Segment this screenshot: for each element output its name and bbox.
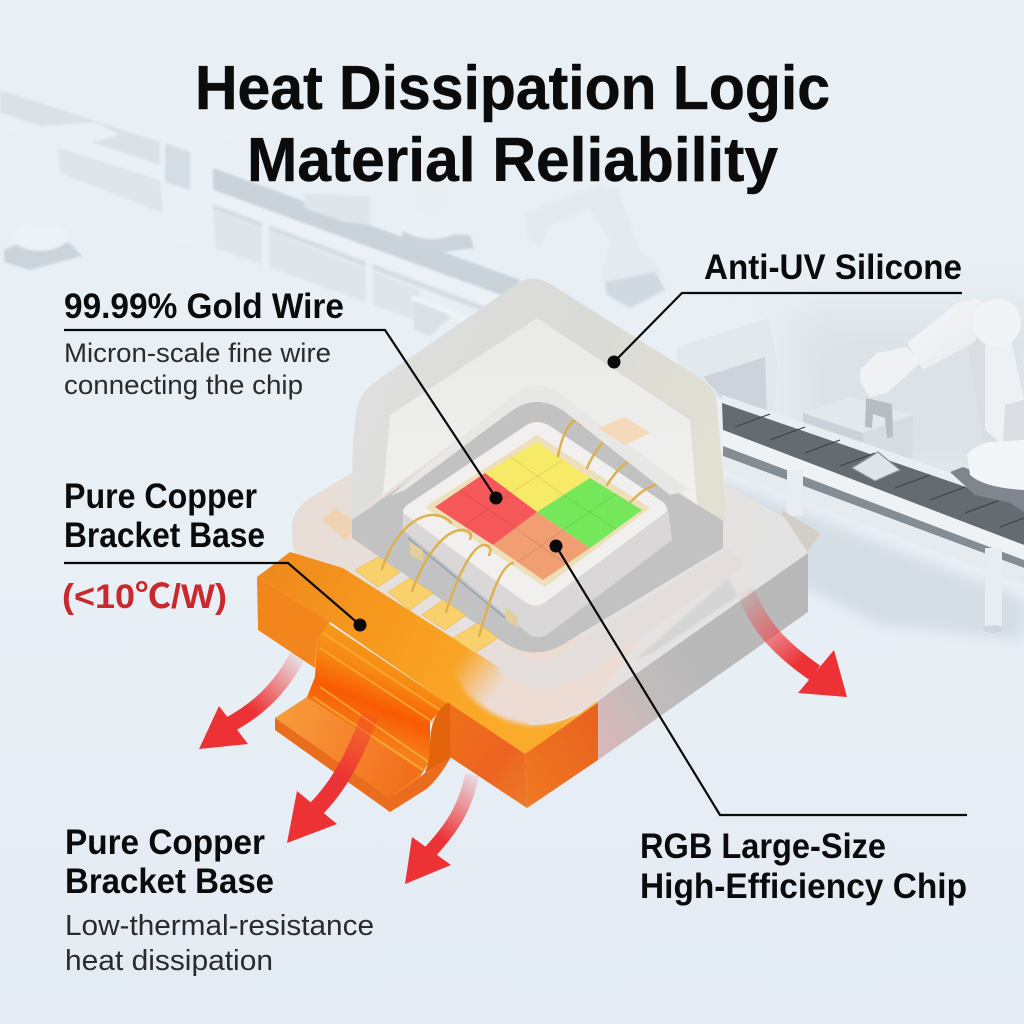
table edge — [412, 295, 470, 325]
dome inner face — [383, 318, 697, 505]
silicone dome — [352, 278, 727, 523]
callout: pure copper bracket base lower: Low-thermal-resistance — [65, 910, 374, 942]
step wall — [425, 703, 451, 772]
robot upper arm — [907, 298, 990, 370]
robot elbow — [973, 299, 1021, 347]
product on belt — [852, 452, 900, 481]
robot base plate — [950, 467, 1024, 512]
tab front — [275, 718, 390, 812]
dome outer band — [352, 278, 727, 523]
robot gripper — [865, 398, 893, 438]
dome inner ring — [390, 385, 690, 496]
left block face — [257, 577, 330, 668]
callout: gold wire: connecting the chip — [64, 370, 303, 400]
arrow left — [199, 655, 298, 749]
conveyor legs — [787, 470, 803, 516]
arrow middle — [287, 715, 370, 843]
copper bracket — [257, 552, 640, 812]
orange reflection — [598, 417, 650, 445]
top surface — [257, 552, 598, 753]
callout: pure copper bracket base lower: Bracket Base — [65, 862, 274, 901]
arrow back right — [745, 590, 847, 697]
gold pads — [355, 557, 498, 653]
bend surface — [275, 623, 447, 798]
faded robot middle — [304, 125, 474, 254]
faded robot arm — [412, 185, 665, 336]
title — [195, 54, 830, 195]
gold wires — [382, 420, 689, 636]
robot wrist — [860, 347, 920, 397]
frosted fade over copper — [440, 630, 640, 725]
frosted top plate — [292, 420, 808, 725]
body right face — [598, 553, 808, 760]
heat arrows — [199, 590, 847, 884]
callout: gold wire: 99.99% Gold Wire — [64, 287, 344, 326]
gray recess and step — [352, 400, 745, 687]
shadow under right conveyor — [720, 480, 1024, 640]
yellow quadrant — [485, 442, 590, 512]
bend highlights — [313, 633, 440, 770]
RGB chip — [425, 435, 650, 587]
callout: pure copper bracket base lower — [65, 823, 374, 977]
title: Heat Dissipation Logic — [195, 54, 830, 123]
orange quadrant — [493, 512, 590, 580]
callout: pure copper bracket base upper — [62, 477, 366, 632]
tan edge — [782, 510, 820, 553]
green quadrant — [537, 478, 642, 548]
box under gripper — [803, 397, 913, 470]
callout: pure copper bracket base lower: Pure Copper — [65, 823, 265, 862]
robot column — [968, 310, 1024, 447]
callout: pure copper bracket base upper: Bracket Base — [64, 516, 265, 555]
arrow right — [405, 775, 472, 884]
callout: RGB chip: High-Efficiency Chip — [640, 867, 967, 906]
right side gate — [607, 300, 777, 413]
callout: pure copper bracket base upper: Pure Copper — [64, 477, 257, 516]
tab top — [275, 697, 423, 798]
title: Material Reliability — [247, 126, 778, 195]
robot pedestal — [967, 440, 1024, 490]
orange reflection on plate — [322, 508, 362, 540]
callout: gold wire — [64, 287, 502, 504]
background shade behind right robot — [790, 310, 1024, 480]
front faces — [450, 703, 527, 808]
callout: pure copper bracket base lower: heat dissipation — [65, 945, 273, 977]
callout: gold wire: Micron-scale fine wire — [64, 338, 331, 368]
callout: RGB chip — [550, 540, 967, 906]
robot column front — [985, 335, 1024, 445]
callout: anti-UV silicone — [608, 248, 962, 368]
right conveyor — [722, 395, 1024, 633]
faded robot left — [4, 122, 120, 270]
callout: pure copper bracket base upper: (<10℃/W) — [62, 578, 227, 616]
faded factory line, left — [0, 90, 665, 336]
LED package body — [292, 420, 820, 760]
callout: anti-UV silicone: Anti-UV Silicone — [704, 248, 962, 287]
callout: RGB chip: RGB Large-Size — [640, 827, 886, 866]
red quadrant — [435, 473, 537, 545]
chip holder — [403, 422, 672, 637]
right robot arm — [860, 298, 1024, 512]
